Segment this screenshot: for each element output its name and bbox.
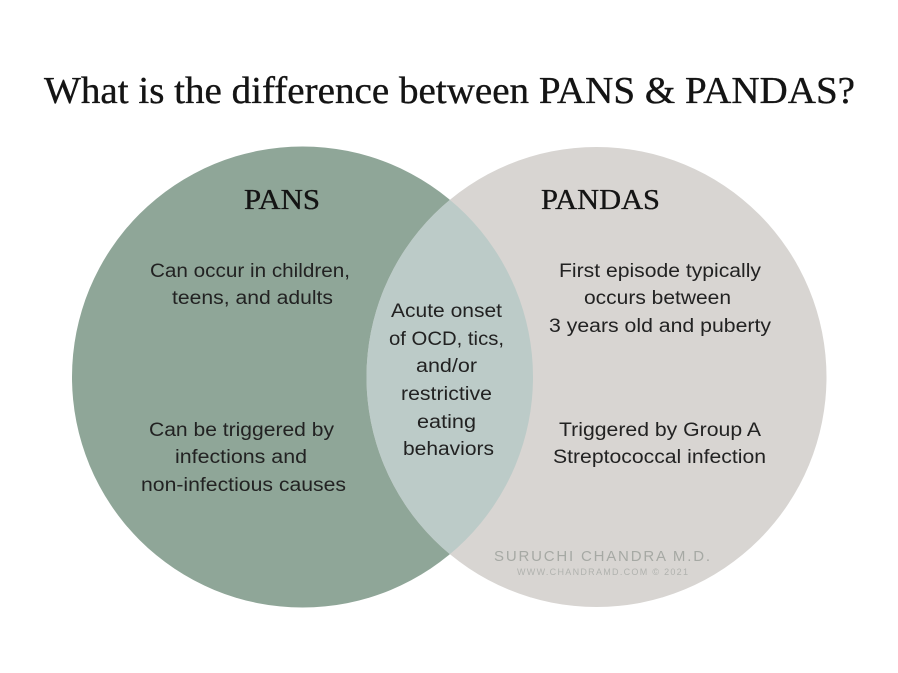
text: PANDAS trigger (553, 420, 766, 468)
watermark: WWW.CHANDRAMD.COM © 2021 (517, 567, 688, 577)
text: PANS triggers (141, 420, 346, 496)
text: PANDAS first episode: occurs between (584, 288, 731, 309)
text: shared symptoms: behaviors (403, 439, 494, 460)
text: PANS triggers: infections and (175, 447, 307, 468)
text: PANDAS trigger: Streptococcal infection (553, 447, 766, 468)
text: PANDAS first episode: First episode typically (559, 261, 762, 282)
text: PANS age range (150, 261, 350, 309)
text: shared symptoms: eating (417, 412, 476, 433)
text: PANDAS first episode (549, 261, 772, 337)
text: PANS age range: Can occur in children, (150, 261, 350, 282)
circle: PANDAS (366, 147, 826, 607)
watermark (494, 548, 710, 577)
circle: PANS (72, 146, 533, 608)
text: PANS age range: teens, and adults (172, 288, 333, 309)
overlap region (366, 200, 533, 554)
text: shared symptoms: Acute onset (391, 301, 503, 322)
title: What is the difference between PANS & PANDAS? (44, 70, 855, 112)
heading: PANDAS: PANDAS (541, 185, 660, 216)
heading: PANS: PANS (244, 185, 320, 216)
text: PANS triggers: non-infectious causes (141, 475, 346, 496)
text: PANDAS first episode: 3 years old and puberty (549, 316, 772, 337)
text: shared symptoms: of OCD, tics, (389, 329, 504, 350)
text: PANDAS trigger: Triggered by Group A (559, 420, 761, 441)
text: PANS triggers: Can be triggered by (149, 420, 335, 441)
venn diagram (72, 146, 826, 608)
text: shared symptoms: restrictive (401, 384, 492, 405)
watermark: SURUCHI CHANDRA M.D. (494, 548, 710, 565)
text: shared symptoms: and/or (416, 356, 478, 377)
text: shared symptoms (389, 301, 504, 460)
